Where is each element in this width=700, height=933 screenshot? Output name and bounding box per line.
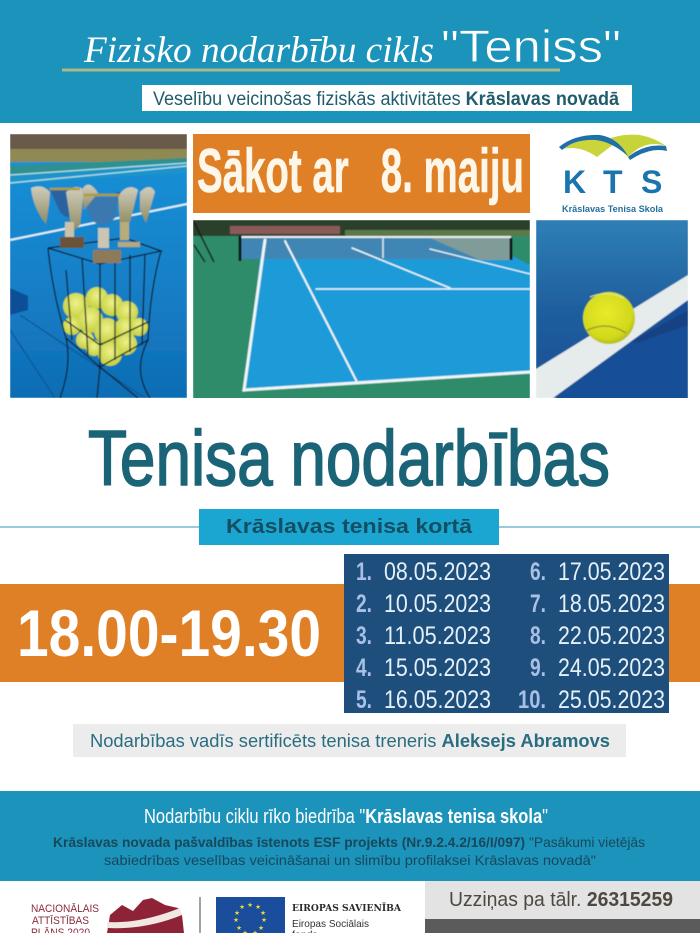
logo: European Union: ★ — [234, 909, 240, 917]
logo: national development plan: ATTĪSTĪBAS — [32, 915, 89, 927]
tennis net — [240, 236, 511, 261]
dates column 2: 8. — [530, 622, 546, 650]
dates column 1: 11.05.2023 — [384, 622, 491, 650]
logo: European Union: ★ — [239, 903, 245, 911]
dates column 1: 2. — [356, 590, 372, 618]
wire basket — [48, 238, 161, 398]
subtitle box: Veselību veicinošas fiziskās aktivitātes Krāslavas novadā — [153, 89, 619, 110]
court lines — [244, 240, 530, 390]
dates column 2: 25.05.2023 — [558, 686, 665, 714]
logo: national development plan — [31, 898, 184, 933]
organiser band — [0, 791, 700, 881]
time band — [0, 584, 700, 682]
logo: national development plan: NACIONĀLAIS — [31, 903, 99, 915]
logo: European Union: ★ — [236, 924, 242, 932]
contact box: Uzziņas pa tālr. 26315259 — [449, 889, 673, 911]
logo: European Union: ★ — [258, 924, 264, 932]
photo: tennis court — [193, 220, 530, 400]
project text line 1: Krāslavas novada pašvaldības īstenots ESF projekts (Nr.9.2.4.2/16/I/097) "Pasākumi vietējās — [53, 834, 645, 850]
coach bar — [73, 724, 626, 757]
logo: European Union: ★ — [247, 901, 253, 909]
trophies — [31, 185, 155, 263]
dates column 2: 6. — [530, 558, 546, 586]
logo: European Union: ★ — [260, 909, 266, 917]
dates column 1: 16.05.2023 — [384, 686, 491, 714]
dates column 2: 7. — [530, 590, 546, 618]
dates column 2: 18.05.2023 — [558, 590, 665, 618]
location label — [0, 509, 700, 545]
logo: European Union: ★ — [233, 916, 239, 924]
time band: 18.00-19.30 — [17, 596, 321, 670]
dates column 2: 24.05.2023 — [558, 654, 665, 682]
dates column 1: 1. — [356, 558, 372, 586]
logo letters: T — [603, 164, 623, 200]
dates column 2: 10. — [518, 686, 546, 714]
project text line 2: sabiedrības veselības veicināšanai un slimību profilaksei Krāslavas novadā" — [104, 852, 596, 868]
dates column 1: 10.05.2023 — [384, 590, 491, 618]
logo: European Union: ★ — [255, 903, 261, 911]
EU fund label: Eiropas Sociālais — [292, 918, 369, 930]
contact box — [425, 881, 700, 933]
dates column 1: 08.05.2023 — [384, 558, 491, 586]
logo letters: K — [563, 164, 586, 200]
logo letters: S — [641, 164, 662, 200]
dates column 1: 3. — [356, 622, 372, 650]
photo: tennis ball on line — [536, 220, 688, 400]
dates column 2: 9. — [530, 654, 546, 682]
header underline — [62, 68, 560, 72]
dates table — [344, 554, 669, 714]
dates column 2 — [518, 558, 665, 714]
logo caption: Krāslavas Tenisa Skola — [562, 204, 664, 214]
logo: KTS — [559, 135, 667, 214]
logo letters — [563, 164, 662, 200]
header title Teniss: "Teniss" — [441, 21, 621, 72]
logo: European Union — [216, 897, 402, 933]
coach bar: Nodarbības vadīs sertificēts tenisa treneris Aleksejs Abramovs — [90, 731, 610, 751]
tennis balls in basket — [63, 287, 148, 366]
divider — [200, 897, 201, 933]
dates column 1: 15.05.2023 — [384, 654, 491, 682]
dates column 1: 5. — [356, 686, 372, 714]
dates column 1 — [356, 558, 491, 714]
location label: Krāslavas tenisa kortā — [226, 516, 473, 538]
header banner — [0, 0, 700, 123]
EU label: EIROPAS SAVIENĪBA — [292, 902, 402, 914]
dates column 2: 17.05.2023 — [558, 558, 665, 586]
logo: European Union: ★ — [261, 916, 267, 924]
dates column 2: 22.05.2023 — [558, 622, 665, 650]
header script title: Fizisko nodarbību cikls — [83, 30, 434, 71]
orange banner: start date — [193, 134, 530, 213]
dates column 1: 4. — [356, 654, 372, 682]
organiser line: Nodarbību ciklu rīko biedrība "Krāslavas tenisa skola" — [144, 806, 548, 828]
photo: trophies and ball basket — [10, 134, 187, 398]
